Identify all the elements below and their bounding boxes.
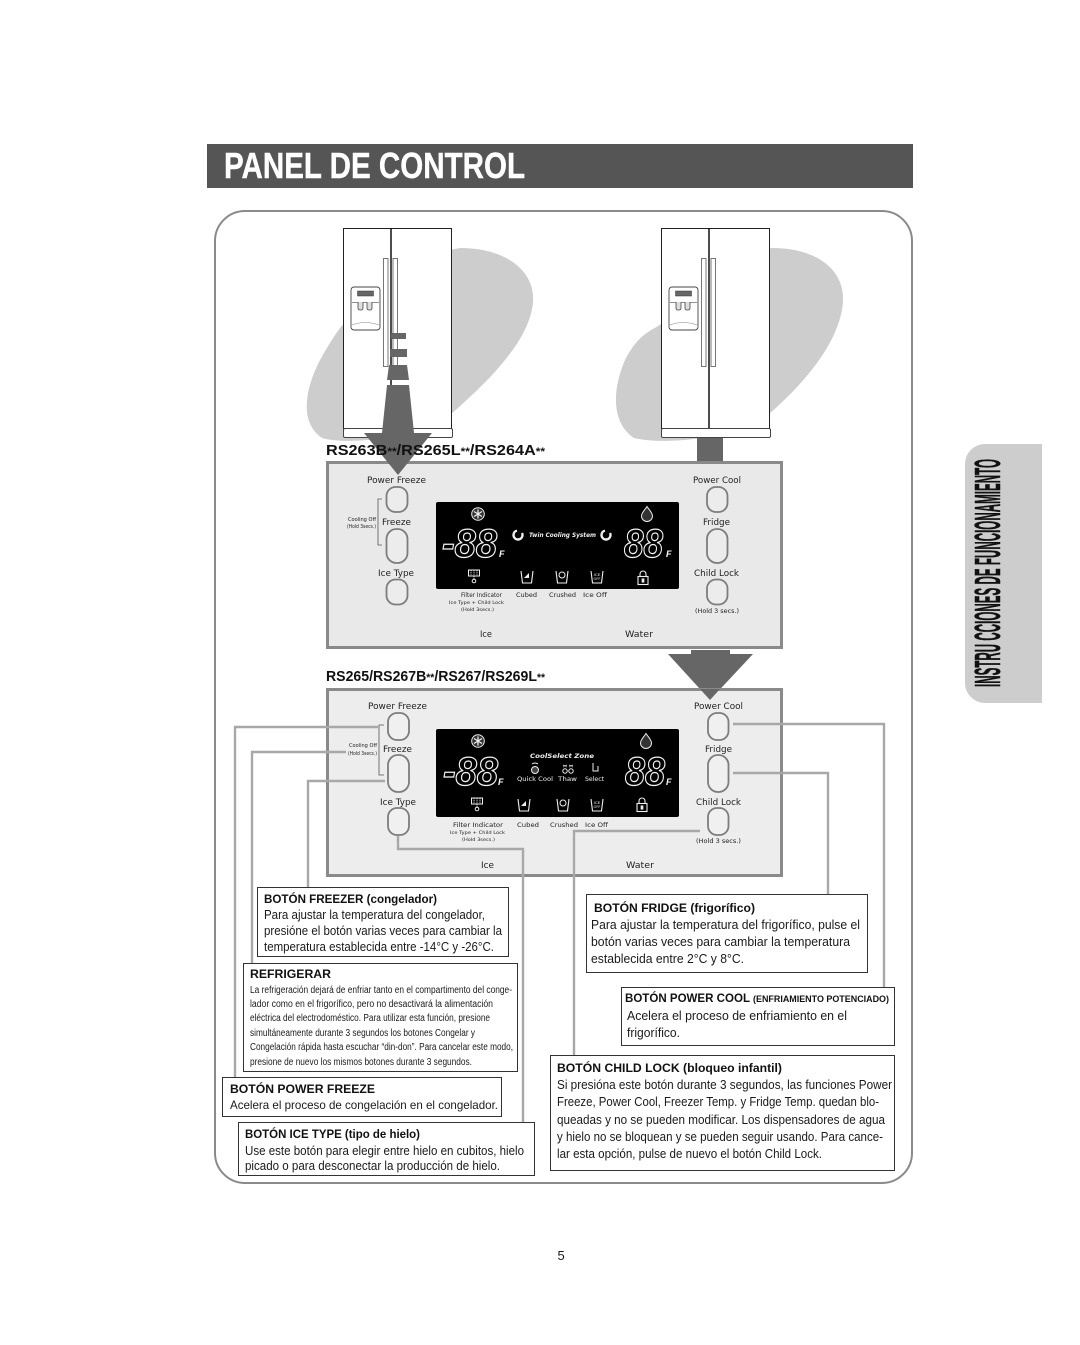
panel 2 display: F — [666, 777, 672, 787]
panel 1 buttons — [386, 487, 728, 604]
gray backdrop blob left — [307, 248, 533, 441]
callout: ice type: Use este botón para elegir entre hielo en cubitos, hielo — [245, 1144, 524, 1158]
panel 1 display: F — [499, 549, 505, 559]
panel 1 button labels: (Hold 3secs.) — [461, 607, 494, 613]
callout: child lock: Si presióna este botón durante 3 segundos, las funciones Power — [557, 1078, 892, 1092]
arrow tip over panel 2 — [700, 689, 720, 700]
callout: freezer button: BOTÓN FREEZER (congelador) — [264, 891, 437, 906]
panel 2 button labels: Crushed — [550, 821, 578, 829]
panel 2 button labels: Water — [626, 861, 655, 871]
panel 2 display: Select — [585, 776, 605, 783]
panel 2 button labels: Cubed — [517, 821, 539, 829]
connector lines from buttons to callouts — [235, 724, 884, 1122]
panel 2 display: -88 — [443, 750, 499, 794]
panel 2 bracket — [379, 725, 384, 775]
panel 1 button labels: Fridge — [703, 518, 730, 528]
panel 2 button labels: (Hold 3 secs.) — [696, 837, 741, 845]
callout: child lock: BOTÓN CHILD LOCK (bloqueo infantil) — [557, 1060, 782, 1075]
panel 2 button labels: Ice Type + Child Lock — [450, 830, 505, 836]
callout: refrigerar: REFRIGERAR — [250, 967, 331, 981]
text: INSTRU CCIONES DE FUNCIONAMIENTO — [967, 459, 1008, 687]
panel 2 button labels: Child Lock — [696, 798, 741, 808]
callout: fridge button: botón varias veces para cambiar la temperatura — [591, 935, 850, 949]
panel 1 button labels: Ice Type — [378, 569, 414, 579]
panel 1 display — [436, 502, 679, 589]
panel 1 button labels: Power Cool — [693, 476, 741, 486]
callout: fridge button: Para ajustar la temperatura del frigorífico, pulse el — [591, 918, 860, 932]
gray backdrop blob right — [616, 248, 843, 441]
callout: child lock — [550, 1056, 894, 1170]
panel 1 display: Twin Cooling System — [529, 532, 596, 539]
panel 2 button labels: Ice — [481, 861, 494, 871]
fridge drawing left — [344, 228, 452, 438]
panel 2 contents — [348, 702, 743, 871]
callout: ice type: picado o para desconectar la producción de hielo. — [245, 1159, 500, 1173]
panel 1 button labels — [347, 476, 741, 640]
callout: refrigerar: Congelación rápida hasta escuchar “din-don”. Para cancelar este modo, — [250, 1042, 513, 1053]
callout: power cool — [622, 988, 894, 1046]
panel 1 bracket — [378, 499, 382, 545]
panel 2 button labels: Power Freeze — [368, 702, 427, 712]
callout: child lock: queadas y no se pueden modificar. Los dispensadores de agua — [557, 1113, 885, 1127]
panel 2 button labels: Filter Indicator — [453, 821, 503, 829]
callout: fridge button: establecida entre 2°C y 8°C. — [591, 952, 744, 966]
panel 2 button labels: Freeze — [383, 745, 412, 755]
heading: model group 2: RS265/RS267B**/RS267/RS269L** — [326, 668, 546, 685]
panel 1 button labels: Crushed — [549, 591, 576, 599]
panel 2 display: OFF — [594, 805, 600, 809]
panel 2 display: 88 — [625, 750, 666, 794]
callout: freezer button — [258, 888, 508, 956]
panel 2 display: ICE — [594, 801, 600, 805]
panel 2 display — [436, 729, 679, 817]
callout: child lock: lar esta opción, pulse de nuevo el botón Child Lock. — [557, 1147, 822, 1161]
panel 1 button labels: Filter Indicator — [461, 591, 502, 599]
callout: power freeze: Acelera el proceso de congelación en el congelador. — [230, 1098, 498, 1112]
callout: refrigerar: eléctrica del electrodoméstico. Para utilizar esta función, presione — [250, 1013, 490, 1024]
panel 1 button labels: Child Lock — [694, 569, 739, 579]
callout: fridge button: BOTÓN FRIDGE (frigorífico) — [594, 900, 755, 915]
panel 1 display: ICE — [594, 573, 600, 577]
callout: fridge button — [586, 894, 868, 972]
panel 1 button labels: Ice Type + Child Lock — [449, 600, 504, 606]
panel 2 display: Thaw — [557, 776, 577, 783]
title banner: PANEL DE CONTROL — [224, 145, 525, 186]
callout: child lock: Freeze, Power Cool, Freezer Temp. y Fridge Temp. quedan blo- — [557, 1095, 879, 1109]
panel 1 display: -88 — [442, 522, 498, 566]
callout: refrigerar: simultáneamente durante 3 segundos los botones Congelar y — [250, 1028, 475, 1039]
panel 1 button labels: Water — [625, 630, 654, 640]
panel 2 button labels: (Hold 3secs.) — [462, 837, 495, 843]
callout: power cool: (ENFRIAMIENTO POTENCIADO) — [753, 994, 889, 1005]
arrow: left fridge to panel 1 — [364, 333, 432, 475]
callout: power freeze — [222, 1078, 502, 1116]
callout: freezer button: temperatura establecida entre -14°C y -26°C. — [264, 940, 494, 954]
panel 1 button labels: Cubed — [516, 591, 537, 599]
title banner — [207, 144, 913, 188]
callout: child lock: y hielo no se bloquean y se pueden seguir usando. Para cance- — [557, 1130, 883, 1144]
panel 2 button labels: Ice Type — [380, 798, 416, 808]
panel 1 button labels: (Hold 3secs.) — [347, 524, 376, 530]
callout: freezer button: presióne el botón varias veces para cambiar la — [264, 924, 502, 938]
panel 1: control panel — [328, 462, 782, 648]
panel 1 display: F — [666, 549, 672, 559]
panel 2 button labels: Power Cool — [694, 702, 743, 712]
panel 2 button labels — [348, 702, 743, 871]
outer rounded frame — [215, 211, 912, 1183]
callout: ice type — [238, 1122, 534, 1176]
illustration: left refrigerator — [307, 228, 533, 441]
panel 1 contents — [347, 476, 741, 640]
panel 2 buttons — [388, 713, 728, 835]
panel 2: control panel — [328, 690, 782, 876]
fridge drawing right — [662, 228, 770, 438]
arrow: right fridge to panel 2 — [668, 438, 753, 700]
callout: ice type: BOTÓN ICE TYPE (tipo de hielo) — [245, 1126, 420, 1141]
panel 2 button labels: Ice Off — [585, 821, 609, 829]
illustration: right refrigerator — [616, 228, 843, 441]
panel 1 display: 88 — [624, 522, 664, 566]
callout: power cool: frigorífico. — [627, 1026, 680, 1040]
panel 2 display: Quick Cool — [517, 776, 553, 783]
panel 2 button labels: Fridge — [705, 745, 732, 755]
callout: refrigerar: presione de nuevo los mismos botones durante 3 segundos. — [250, 1057, 472, 1068]
panel 2 display: CoolSelect Zone — [530, 752, 595, 760]
callout: refrigerar — [244, 964, 518, 1072]
callout: power freeze: BOTÓN POWER FREEZE — [230, 1081, 375, 1096]
callout: refrigerar: La refrigeración dejará de enfriar tanto en el compartimento del conge- — [250, 985, 512, 996]
callout: power cool: Acelera el proceso de enfriamiento en el — [627, 1009, 847, 1023]
panel 2 button labels: (Hold 3secs.) — [348, 751, 377, 757]
panel 2 button labels: Cooling Off — [349, 743, 377, 749]
panel 1 button labels: Freeze — [382, 518, 411, 528]
heading: model group 1: RS263B **/RS265L **/RS264A ** — [326, 442, 546, 459]
panel 1 button labels: Power Freeze — [367, 476, 426, 486]
panel 2 display: F — [498, 777, 504, 787]
panel 1 button labels: Cooling Off — [348, 517, 376, 523]
callout: refrigerar: lador como en el frigorífico, pero no desactivará la alimentación — [250, 999, 493, 1010]
callout: freezer button: Para ajustar la temperatura del congelador, — [264, 908, 485, 922]
panel 1 button labels: (Hold 3 secs.) — [695, 607, 739, 615]
callout: power cool: BOTÓN POWER COOL — [625, 990, 750, 1005]
panel 1 display: OFF — [594, 577, 600, 581]
side tab: section label — [965, 444, 1042, 703]
panel 1 button labels: Ice — [480, 630, 492, 640]
panel 1 button labels: Ice Off — [583, 591, 608, 599]
page number: 5 — [558, 1248, 565, 1263]
